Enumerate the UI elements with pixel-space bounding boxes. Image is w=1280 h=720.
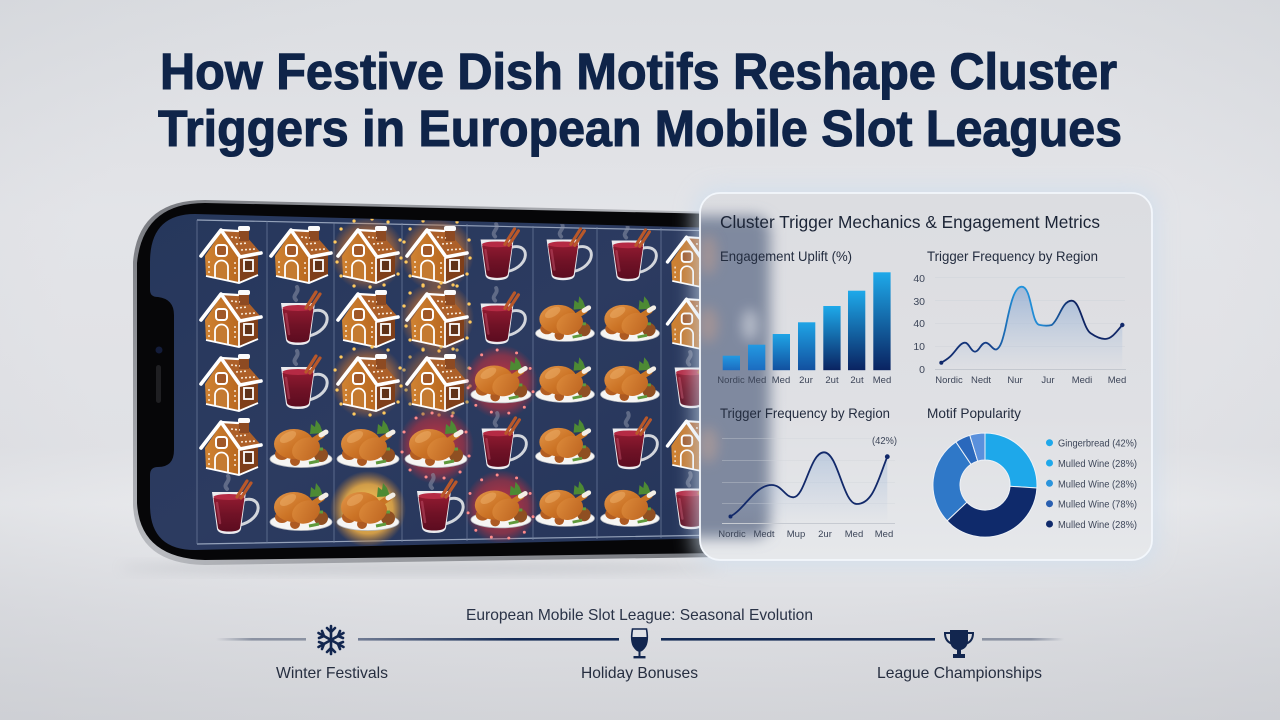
phone frame (133, 200, 720, 565)
x axis labels: Medi (1072, 375, 1092, 386)
icon: roast turkey (270, 483, 332, 530)
icon: roast turkey (337, 420, 399, 468)
icon: mulled wine (674, 350, 700, 408)
bar axis labels (717, 375, 891, 386)
icon: gold glowing roast turkey (330, 471, 406, 547)
phone screen (150, 214, 720, 550)
icon: roast turkey (601, 357, 659, 402)
line chart: lower trigger frequency (718, 405, 897, 540)
y axis labels: 10 (913, 341, 925, 353)
x axis labels: 2ur (818, 529, 832, 540)
chart heading: Trigger Frequency by Region (927, 248, 1098, 264)
icon: mulled wine (481, 288, 525, 344)
timeline: seasonal evolution (216, 607, 1064, 682)
icon: gingerbread house (666, 419, 700, 472)
timeline heading: European Mobile Slot League: Seasonal Evolution (466, 607, 813, 624)
bar axis labels: 2ut (825, 375, 839, 386)
timeline label: league championships: League Championships (877, 665, 1042, 682)
x axis labels: Jur (1041, 375, 1055, 386)
panel heading: Cluster Trigger Mechanics & Engagement Metrics (720, 212, 1100, 232)
icon: gingerbread house (201, 290, 261, 347)
y axis labels: 40 (913, 273, 925, 285)
trend line (730, 452, 887, 517)
x axis labels (718, 529, 893, 540)
bars (723, 272, 891, 370)
icon: gingerbread house (338, 290, 398, 347)
line chart: trigger frequency by region (913, 248, 1126, 386)
legend: Mulled Wine (78%) (1058, 498, 1137, 510)
speaker (156, 365, 161, 403)
legend: Mulled Wine (28%) (1058, 519, 1137, 531)
icon: roast turkey (270, 420, 332, 468)
icon: mulled wine (675, 473, 719, 529)
bar chart: engagement uplift (717, 248, 891, 386)
phone shadow (120, 563, 720, 573)
icon: mulled wine (212, 476, 258, 534)
chart heading: Motif Popularity (927, 405, 1021, 421)
row 5 symbols (212, 470, 719, 547)
x axis labels: Nordic (718, 529, 746, 540)
y axis labels: 30 (913, 296, 925, 308)
title: Triggers in European Mobile Slot Leagues (158, 100, 1122, 157)
icon: gingerbread house (666, 235, 700, 288)
icon: glowing gingerbread house (331, 217, 405, 291)
panel glow (694, 187, 1158, 566)
bar axis labels: 2ut (850, 375, 864, 386)
bar axis labels: Med (873, 375, 891, 386)
icon: roast turkey (601, 296, 659, 341)
icon: gingerbread house (201, 354, 261, 411)
donut (933, 433, 1037, 537)
icon: wine glass (632, 629, 647, 658)
legend: Mulled Wine (28%) (1058, 478, 1137, 490)
x axis labels (935, 375, 1126, 386)
legend: Gingerbread (42%) (1058, 438, 1137, 450)
chart heading: Trigger Frequency by Region (720, 405, 890, 421)
x axis labels: Nedt (971, 375, 991, 386)
icon: trophy (945, 630, 973, 658)
icon: mulled wine (612, 225, 656, 281)
icon: glowing roast turkey (398, 408, 474, 484)
title: How Festive Dish Motifs Reshape Cluster (160, 43, 1117, 100)
icon: gingerbread house (666, 297, 700, 350)
icon: roast turkey (536, 419, 594, 464)
icon: roast turkey (536, 357, 594, 402)
row 3 symbols (201, 345, 719, 419)
legend: Mulled Wine (28%) (1058, 458, 1137, 470)
icon: glowing gingerbread house (400, 281, 474, 355)
icon: gingerbread house (201, 418, 261, 475)
icon: glowing roast turkey (464, 470, 538, 544)
x axis labels: Med (875, 529, 893, 540)
icon: mulled wine (547, 224, 591, 280)
icon: mulled wine (281, 351, 327, 409)
icon: mulled wine (481, 224, 525, 280)
title (158, 43, 1122, 157)
timeline label: holiday bonuses: Holiday Bonuses (581, 665, 698, 682)
icon: roast turkey (536, 481, 594, 526)
icon: glowing gingerbread house (400, 345, 474, 419)
icon: mulled wine (613, 413, 657, 469)
callout: (42%) (872, 436, 897, 447)
icon: snowflake (318, 626, 344, 654)
icon: mulled wine (482, 413, 526, 469)
icon: mulled wine (281, 287, 327, 345)
y axis labels: 0 (919, 364, 925, 376)
row 1 symbols (201, 217, 724, 291)
x axis labels: Mup (787, 529, 805, 540)
row 4 symbols (201, 408, 724, 484)
area under curve (941, 287, 1122, 370)
chart heading: Engagement Uplift (%) (720, 248, 852, 264)
front camera (156, 346, 162, 354)
trend line (941, 287, 1122, 363)
y axis labels (913, 273, 925, 376)
row 2 symbols (201, 281, 724, 355)
bar axis labels: Nordic (717, 375, 745, 386)
icon: gingerbread house (271, 226, 331, 283)
icon: roast turkey (536, 296, 594, 341)
icon: glowing gingerbread house (331, 345, 405, 419)
x axis labels: Nordic (935, 375, 963, 386)
area under curve (730, 452, 887, 523)
bar axis labels: Med (772, 375, 790, 386)
icon: gingerbread house (201, 226, 261, 283)
bar axis labels: Med (748, 375, 766, 386)
icon: glowing roast turkey (464, 345, 538, 419)
phone mockup (133, 200, 724, 565)
x axis labels: Nur (1007, 375, 1023, 386)
reel grid (197, 217, 724, 547)
x axis labels: Med (1108, 375, 1126, 386)
x axis labels: Med (845, 529, 863, 540)
y axis labels: 40 (913, 318, 925, 330)
donut chart: motif popularity (927, 405, 1137, 537)
icon: glowing gingerbread house (400, 217, 474, 291)
x axis labels: Medt (753, 529, 775, 540)
legend (1046, 438, 1137, 531)
icon: mulled wine (417, 475, 463, 533)
bar axis labels: 2ur (799, 375, 813, 386)
icon: roast turkey (601, 481, 659, 526)
phone bezel (137, 203, 720, 560)
timeline label: winter festivals: Winter Festivals (276, 665, 388, 682)
blurred phone behind glass (680, 216, 770, 538)
panel: cluster trigger mechanics and engagement metrics (680, 193, 1152, 560)
